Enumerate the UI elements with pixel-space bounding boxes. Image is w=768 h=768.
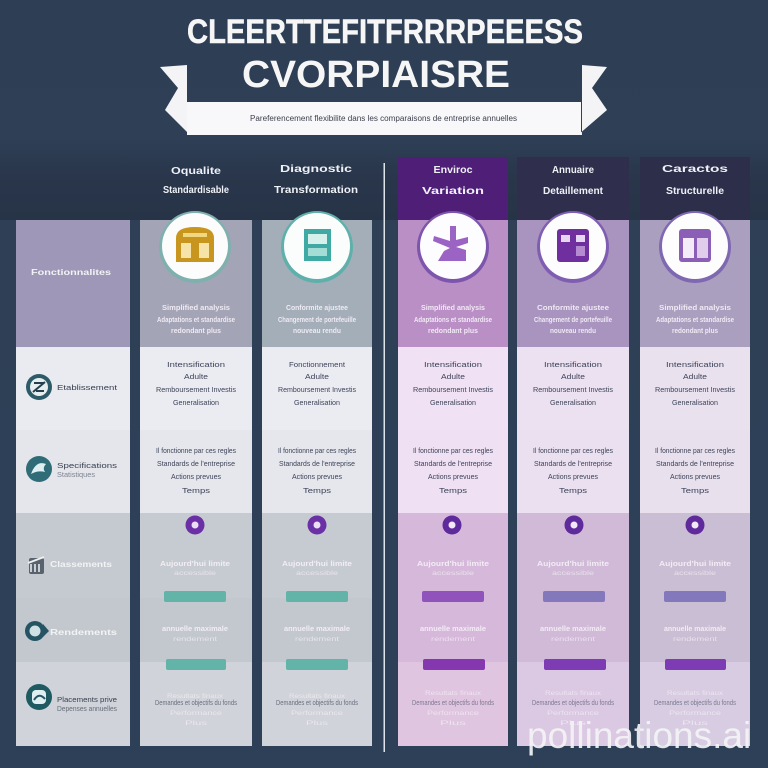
panel: column two, teal: Conformite ajustee: [286, 303, 348, 312]
panel: column two, teal: Plus: [306, 720, 329, 727]
column headers: Detaillement: [543, 186, 604, 197]
panel: column five, lavender: Adaptations et standardise: [656, 315, 734, 324]
panel: column one, gold: Aujourd'hui limite: [160, 559, 230, 568]
icon: purple plant badge: [417, 211, 489, 283]
panel: column two, teal: Aujourd'hui limite: [282, 559, 352, 568]
column headers: Standardisable: [163, 185, 229, 196]
panel: column one, gold: Temps: [182, 486, 210, 495]
icon: row icon four: [25, 621, 49, 641]
panel: column four, violet: nouveau rendu: [550, 326, 596, 335]
panel: column four, violet: Temps: [559, 486, 587, 495]
panel: column three, purple: Aujourd'hui limite: [417, 559, 489, 568]
panel: column five, lavender: annuelle maximale: [664, 624, 726, 633]
panel: column five, lavender: Simplified analysis: [659, 303, 731, 312]
panel: column four, violet: rendement: [551, 636, 595, 643]
column headers: Diagnostic: [280, 164, 353, 175]
panel: column one, gold: [140, 220, 252, 746]
panel: column four, violet: Generalisation: [550, 398, 596, 407]
panel: column one, gold: Actions prevues: [171, 472, 221, 481]
panel: column three, purple: redondant plus: [428, 326, 478, 335]
panel: column one, gold: Demandes et objectifs du fonds: [155, 698, 237, 707]
panel: column three, purple: Resultats finaux: [425, 690, 482, 697]
panel: column two, teal: rendement: [295, 636, 339, 643]
panel: column five, lavender: accessible: [674, 570, 717, 577]
panel: column three, purple: Standards de l'entreprise: [414, 459, 492, 468]
panel: column three, purple: rendement: [431, 636, 475, 643]
panel: column two, teal: Generalisation: [294, 398, 340, 407]
title: CLEERTTEFITFRRRPEEESS: [187, 13, 583, 51]
column headers: Oqualite: [171, 166, 222, 177]
panel: column four, violet: Conformite ajustee: [537, 303, 609, 312]
panel: column four, violet: Intensification: [544, 360, 602, 369]
panel: column five, lavender: rendement: [673, 636, 717, 643]
column headers: [163, 164, 729, 197]
panel: column three, purple: Adaptations et standardise: [414, 315, 492, 324]
panel: column four, violet: Standards de l'entreprise: [534, 459, 612, 468]
panel: row labels column: Classements: [50, 560, 113, 569]
panel: column two, teal: Temps: [303, 486, 331, 495]
panel: column one, gold: accessible: [174, 570, 217, 577]
panel: column one, gold: redondant plus: [171, 326, 221, 335]
column headers: Structurelle: [666, 186, 724, 197]
panel: column two, teal: [262, 220, 372, 746]
panel: column four, violet: Performance: [547, 710, 600, 717]
panel: column one, gold: Simplified analysis: [162, 303, 230, 312]
divider: [384, 163, 385, 752]
panel: column two, teal: Fonctionnement: [289, 360, 346, 369]
watermark: pollinations.ai: [527, 715, 751, 756]
column headers: Annuaire: [552, 165, 594, 176]
icon: row icon five: [26, 684, 52, 710]
panel: column four, violet: accessible: [552, 570, 595, 577]
panel: column two, teal: Il fonctionne par ces regles: [278, 446, 356, 455]
panel: column one, gold: rendement: [173, 636, 217, 643]
ribbon banner: [160, 65, 607, 135]
icon: small purple badges: [186, 516, 704, 534]
title: CVORPIAISRE: [242, 54, 510, 96]
panel: column three, purple: Actions prevues: [428, 472, 478, 481]
panel: column four, violet: Changement de portefeuille: [534, 315, 612, 324]
panel: row labels column: Rendements: [50, 628, 118, 637]
column headers: Caractos: [662, 164, 729, 175]
icon: row icon three: [28, 557, 44, 574]
panel: column three, purple: Il fonctionne par ces regles: [413, 446, 493, 455]
panel: column two, teal: accessible: [296, 570, 339, 577]
panel: column five, lavender: Actions prevues: [670, 472, 720, 481]
panel: column one, gold: annuelle maximale: [162, 624, 228, 633]
panel: column five, lavender: Il fonctionne par ces regles: [655, 446, 735, 455]
panel: column three, purple: annuelle maximale: [420, 624, 486, 633]
panel: column two, teal: Adulte: [305, 372, 329, 381]
panel: column one, gold: Intensification: [167, 360, 225, 369]
panel: column one, gold: Generalisation: [173, 398, 219, 407]
panel: row labels column: Fonctionnalites: [31, 268, 112, 277]
panel: column three, purple: Generalisation: [430, 398, 476, 407]
column headers: Enviroc: [434, 165, 473, 176]
panel: column four, violet: Il fonctionne par ces regles: [533, 446, 613, 455]
panel: column two, teal: Demandes et objectifs du fonds: [276, 698, 358, 707]
panel: column three, purple: Remboursement Investis: [413, 385, 493, 394]
panel: column three, purple: Performance: [427, 710, 480, 717]
panel: column three, purple: Demandes et objectifs du fonds: [412, 698, 494, 707]
panel: column five, lavender: Generalisation: [672, 398, 718, 407]
panel: column three, purple: Intensification: [424, 360, 482, 369]
column headers: Variation: [422, 186, 484, 197]
panel: column five, lavender: Intensification: [666, 360, 724, 369]
panel: column four, violet: Adulte: [561, 372, 585, 381]
panel: row labels column: [16, 220, 130, 746]
panel: column two, teal: nouveau rendu: [293, 326, 341, 335]
icon: lavender box badge: [659, 211, 731, 283]
panel: column five, lavender: Adulte: [683, 372, 707, 381]
panel: column four, violet: Remboursement Investis: [533, 385, 613, 394]
panel: row labels column: Placements prive: [57, 695, 117, 704]
panel: column two, teal: Standards de l'entreprise: [279, 459, 355, 468]
panel: column one, gold: Performance: [170, 710, 223, 717]
panel: column five, lavender: Plus: [682, 720, 710, 727]
panel: column two, teal: Changement de portefeuille: [278, 315, 356, 324]
panel: column five, lavender: [640, 220, 750, 746]
ribbon banner: Pareferencement flexibilite dans les comparaisons de entreprise annuelles: [250, 114, 517, 123]
panel: row labels column: Depenses annuelles: [57, 704, 117, 713]
panel: column three, purple: Simplified analysis: [421, 303, 485, 312]
panel: row labels column: Etablissement: [57, 383, 118, 392]
panel: column one, gold: Resultats finaux: [167, 693, 224, 700]
panel: column five, lavender: Remboursement Investis: [655, 385, 735, 394]
panel: column three, purple: Temps: [439, 486, 467, 495]
panel: column three, purple: Adulte: [441, 372, 465, 381]
panel: column four, violet: Actions prevues: [548, 472, 598, 481]
bars: first rating row: [164, 591, 726, 602]
bars: second rating row: [166, 659, 726, 670]
panel: column one, gold: Remboursement Investis: [156, 385, 236, 394]
panel: column one, gold: Adaptations et standardise: [157, 315, 235, 324]
icon: row icon two: [26, 456, 52, 482]
panel: column five, lavender: Standards de l'entreprise: [656, 459, 734, 468]
panel: column two, teal: Actions prevues: [292, 472, 342, 481]
panel: column two, teal: Remboursement Investis: [278, 385, 356, 394]
icon: row icon one: [26, 374, 52, 400]
panel: column four, violet: [517, 220, 629, 746]
panel: column four, violet: Resultats finaux: [545, 690, 602, 697]
panel: column four, violet: annuelle maximale: [540, 624, 606, 633]
column headers: Transformation: [274, 185, 358, 196]
panel: row labels column: Specifications: [57, 461, 117, 470]
icon: gold chest badge: [159, 211, 231, 283]
panel: column four, violet: Demandes et objectifs du fonds: [532, 698, 614, 707]
panel: column four, violet: Aujourd'hui limite: [537, 559, 609, 568]
panel: column five, lavender: Temps: [681, 486, 709, 495]
panel: column three, purple: [398, 220, 508, 746]
panel: column two, teal: Performance: [291, 710, 344, 717]
panel: column five, lavender: Performance: [669, 710, 722, 717]
panel: column three, purple: accessible: [432, 570, 475, 577]
panel: column one, gold: Plus: [185, 720, 208, 727]
panel: row labels column: Statistiques: [57, 470, 95, 479]
panel: column two, teal: annuelle maximale: [284, 624, 350, 633]
purple header background: [398, 157, 508, 220]
icon: teal book badge: [281, 211, 353, 283]
panel: column five, lavender: Demandes et objectifs du fonds: [654, 698, 736, 707]
icon: violet book badge: [537, 211, 609, 283]
panel: column four, violet: Plus: [560, 720, 588, 727]
panel: column one, gold: Standards de l'entreprise: [157, 459, 235, 468]
panel: column two, teal: Resultats finaux: [289, 693, 346, 700]
panel: column five, lavender: redondant plus: [672, 326, 718, 335]
panel: column five, lavender: Resultats finaux: [667, 690, 724, 697]
panel: column one, gold: Il fonctionne par ces regles: [156, 446, 236, 455]
panel: column one, gold: Adulte: [184, 372, 208, 381]
panel: column three, purple: Plus: [440, 720, 468, 727]
panel: column five, lavender: Aujourd'hui limite: [659, 559, 731, 568]
title: [187, 13, 583, 96]
